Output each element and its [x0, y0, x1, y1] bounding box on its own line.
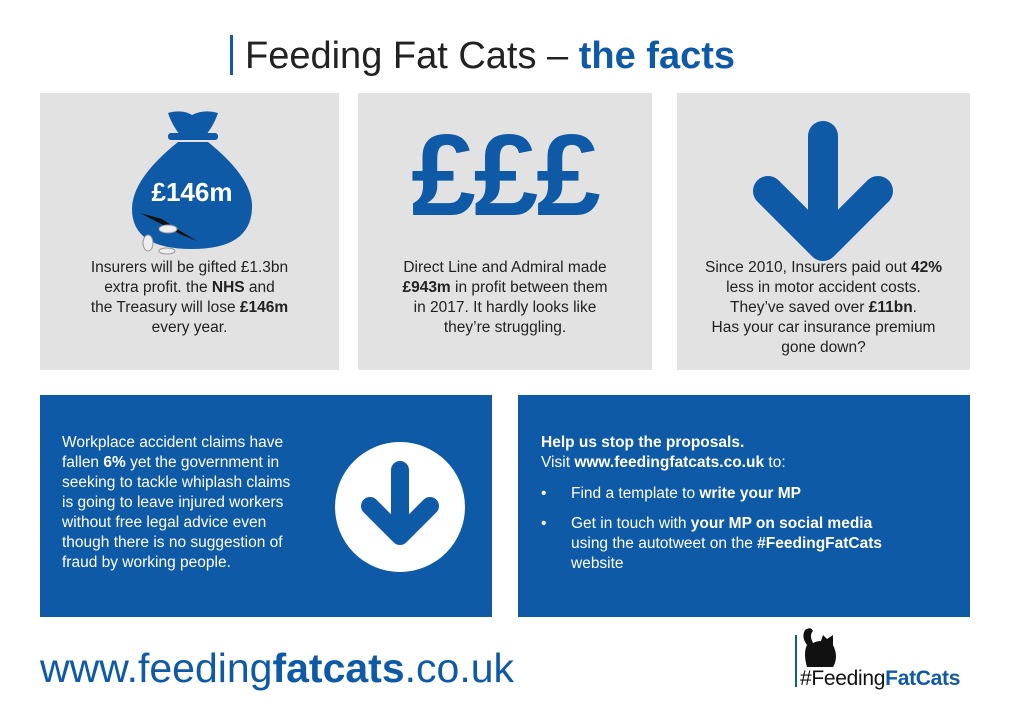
bullet 1: •: [541, 485, 546, 502]
icon: money bag: [132, 111, 252, 254]
text: fallen 6% yet the government in: [62, 454, 279, 471]
text: they’re struggling.: [444, 319, 566, 336]
panel: call to action: [518, 395, 970, 617]
bullet 2: [541, 515, 882, 572]
text: [402, 259, 608, 336]
title: Feeding Fat Cats – the facts: [245, 35, 735, 77]
text: less in motor accident costs.: [726, 279, 921, 296]
text: [705, 259, 942, 356]
text: the Treasury will lose £146m: [91, 299, 288, 316]
text: [62, 434, 290, 571]
panel: money bag: [40, 93, 339, 370]
text: Workplace accident claims have: [62, 434, 283, 451]
text: Since 2010, Insurers paid out 42%: [705, 259, 942, 276]
icon: down arrow: [753, 121, 893, 261]
text: extra profit. the NHS and: [104, 279, 275, 296]
icon: circle arrow: [335, 442, 465, 572]
text: Direct Line and Admiral made: [403, 259, 607, 276]
text: £943m in profit between them: [402, 279, 608, 296]
text: in 2017. It hardly looks like: [414, 299, 596, 316]
text: [91, 259, 288, 336]
text: gone down?: [781, 339, 866, 356]
bullet 1: Find a template to write your MP: [571, 485, 801, 502]
text: fraud by working people.: [62, 554, 231, 571]
text: seeking to tackle whiplash claims: [62, 474, 290, 491]
logo: #FeedingFatCats: [800, 667, 960, 690]
text: is going to leave injured workers: [62, 494, 283, 511]
text: Has your car insurance premium: [712, 319, 935, 336]
heading: [541, 434, 786, 471]
icon: money bag: £146m: [152, 177, 232, 207]
text: every year.: [152, 319, 227, 336]
heading: Help us stop the proposals.: [541, 434, 744, 451]
text: Insurers will be gifted £1.3bn: [91, 259, 288, 276]
logo: [795, 628, 960, 690]
bullet 2: website: [571, 555, 624, 572]
bullet 2: using the autotweet on the #FeedingFatCats: [571, 535, 882, 552]
text: though there is no suggestion of: [62, 534, 283, 551]
text: They’ve saved over £11bn.: [730, 299, 917, 316]
footer url: www.feedingfatcats.co.uk: [40, 645, 514, 691]
text: without free legal advice even: [62, 514, 266, 531]
bullet 2: Get in touch with your MP on social media: [571, 515, 872, 532]
heading: Visit www.feedingfatcats.co.uk to:: [541, 454, 786, 471]
bullet 2: •: [541, 515, 546, 532]
panel: workplace claims: [40, 395, 492, 617]
panel: profits: [358, 93, 652, 370]
icon: cat: [803, 628, 836, 667]
icon: pound signs: £££: [411, 110, 599, 240]
panel: costs: [677, 93, 970, 370]
